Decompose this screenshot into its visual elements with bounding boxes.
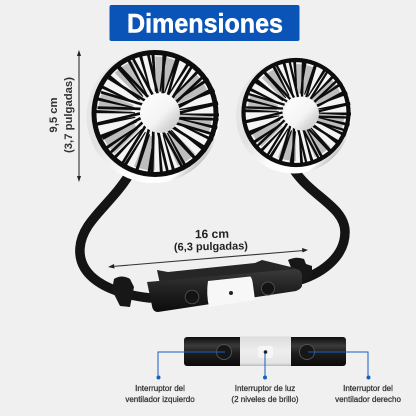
width dimension label: 16 cm xyxy=(195,227,229,241)
width dimension arrow xyxy=(108,248,308,268)
width dimension label: (6,3 pulgadas) xyxy=(174,240,248,254)
raised ridge xyxy=(157,260,298,284)
callout: left switch xyxy=(125,352,225,404)
right button xyxy=(262,282,274,295)
height dimension arrow and label xyxy=(48,50,81,182)
light icon xyxy=(229,291,233,295)
white light panel xyxy=(240,336,291,366)
height dimension arrow and label: 9,5 cm xyxy=(48,97,60,133)
left fan xyxy=(86,50,220,183)
right fan hub xyxy=(285,96,319,130)
left fan hub xyxy=(140,93,180,133)
callout: right switch xyxy=(308,352,401,404)
callout: light switch xyxy=(231,350,299,404)
end clips xyxy=(112,276,134,307)
control bar detail xyxy=(184,336,346,366)
right switch xyxy=(300,344,314,360)
right fan xyxy=(236,58,351,174)
light switch square xyxy=(258,346,273,358)
callout: light switch: (2 niveles de brillo) xyxy=(231,395,299,404)
callout: right switch: ventilador derecho xyxy=(335,395,401,404)
callout: left switch: Interruptor del xyxy=(135,384,185,393)
width dimension label xyxy=(174,227,248,254)
control unit xyxy=(112,258,312,312)
callout: right switch: Interruptor del xyxy=(343,384,393,393)
title banner: Dimensiones xyxy=(127,8,283,38)
callout: light switch: Interruptor de luz xyxy=(235,384,295,393)
left button xyxy=(185,290,199,304)
height dimension arrow and label: (3,7 pulgadas) xyxy=(63,77,75,153)
white light panel xyxy=(207,276,255,307)
left switch xyxy=(216,344,232,360)
flexible neck tube xyxy=(80,170,345,298)
body xyxy=(147,269,302,312)
callout: left switch: ventilador izquierdo xyxy=(125,395,195,404)
